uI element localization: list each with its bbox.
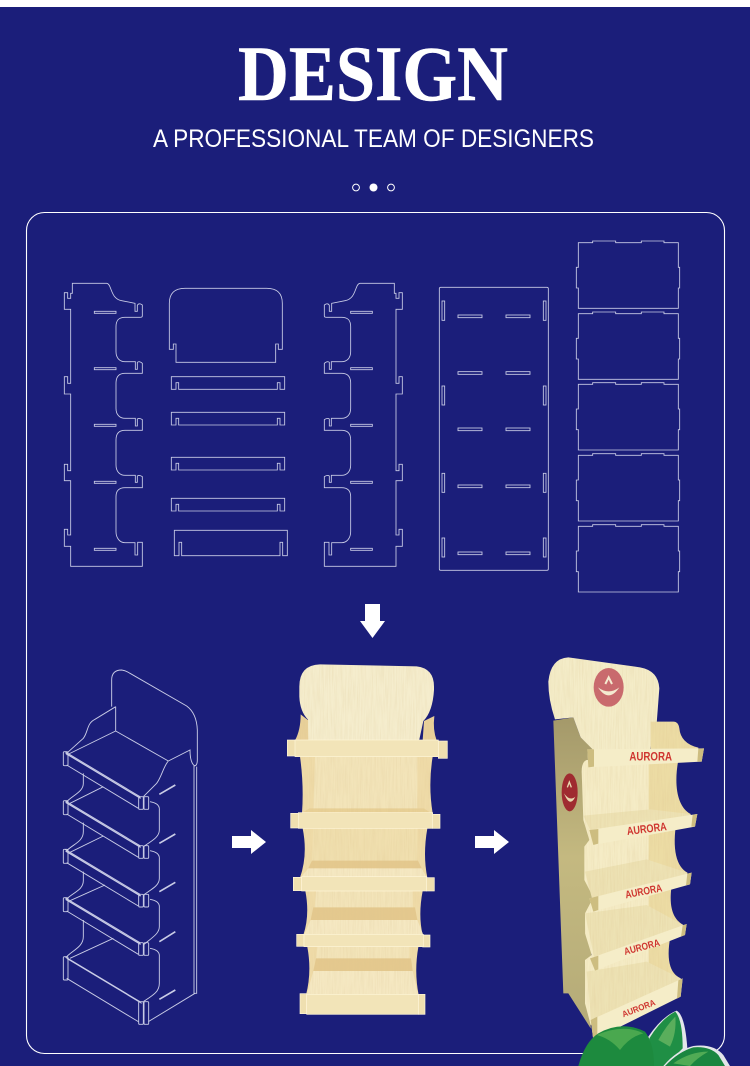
top white strip bbox=[0, 0, 750, 7]
palm leaves bbox=[578, 1011, 730, 1066]
branded wooden stand bbox=[548, 657, 730, 1066]
section 4 bbox=[306, 947, 419, 995]
five shelf boards bbox=[576, 241, 680, 592]
assembled wooden stand bbox=[287, 664, 447, 1014]
shelf floors bbox=[583, 809, 690, 1025]
header board bbox=[299, 664, 434, 741]
header board bbox=[169, 288, 282, 362]
right side piece bbox=[324, 283, 402, 566]
subtitle: A PROFESSIONAL TEAM OF DESIGNERS bbox=[153, 125, 594, 153]
front strips bbox=[287, 740, 447, 1014]
arrow: down bbox=[360, 604, 385, 638]
section 3 bbox=[303, 891, 423, 935]
isometric line drawing of stand bbox=[63, 670, 197, 1024]
back wall bbox=[582, 760, 649, 1025]
side panel bbox=[553, 717, 593, 1028]
branded wooden stand: AURORA bbox=[620, 997, 657, 1019]
panel frame bbox=[26, 212, 724, 1054]
branded front strips: AURORA bbox=[629, 750, 672, 764]
branded front strips bbox=[587, 748, 704, 767]
title: DESIGN bbox=[238, 30, 508, 117]
header side walls bbox=[295, 714, 309, 740]
flat cut-out parts: back panel and shelves bbox=[439, 241, 680, 592]
front strips bbox=[171, 377, 285, 511]
pagination dots bbox=[353, 184, 394, 192]
right walls bbox=[647, 722, 698, 1000]
header board bbox=[548, 657, 659, 750]
branded wooden stand: AURORA bbox=[624, 882, 663, 901]
section 1 bbox=[300, 757, 433, 813]
shelf sections bbox=[295, 664, 437, 995]
logo on side bbox=[562, 773, 578, 811]
logo on header bbox=[594, 668, 624, 707]
bottom strip bbox=[174, 530, 287, 556]
arrow: right 1 bbox=[232, 830, 266, 854]
back panel bbox=[439, 287, 548, 570]
flat cut-out parts: sides and shelves bbox=[64, 283, 402, 566]
left side piece bbox=[64, 283, 142, 566]
branded wooden stand: AURORA bbox=[626, 821, 667, 838]
section 2 bbox=[300, 828, 427, 878]
arrow: right 2 bbox=[475, 830, 509, 854]
branded wooden stand: AURORA bbox=[623, 938, 661, 958]
